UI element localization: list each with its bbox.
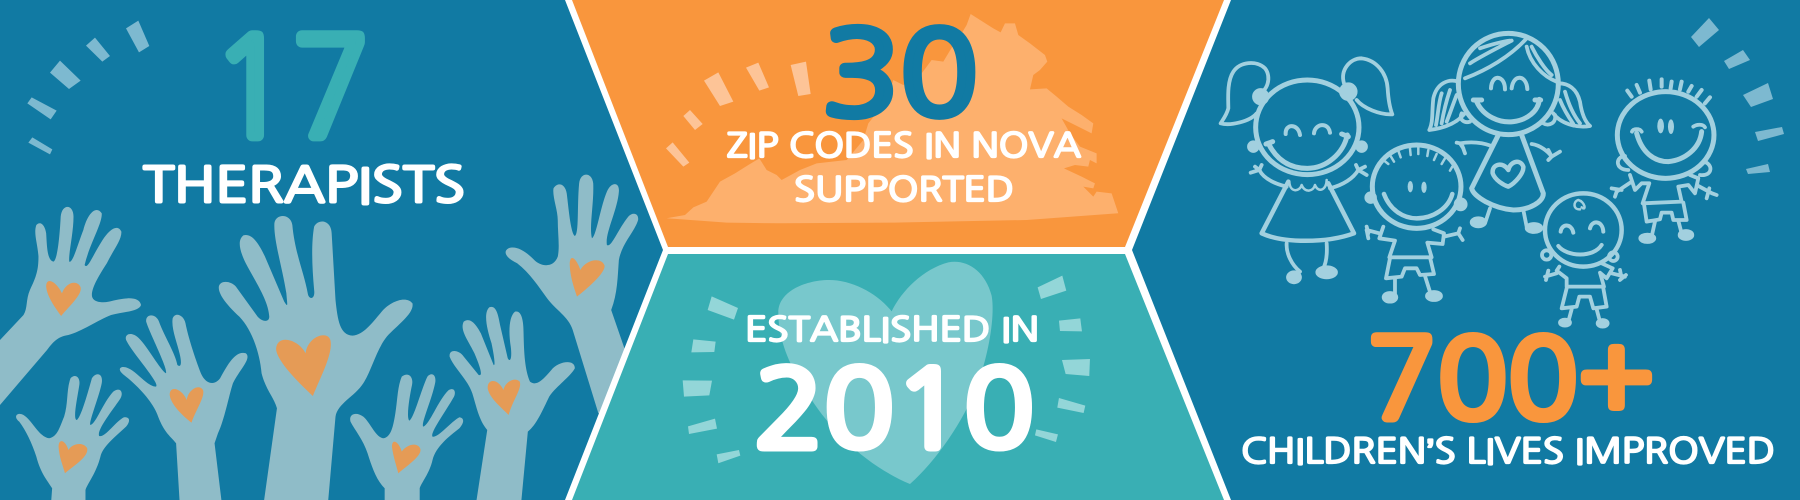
panel: established art [683, 262, 1090, 484]
stat number: 2010: 2010 [754, 357, 1034, 463]
stat number: 30: 30 [822, 16, 978, 132]
icon: large heart [778, 262, 993, 484]
icon: Virginia state map [667, 14, 1118, 223]
icon: raised hands [0, 175, 641, 500]
label: zip codes line 1: ZIP CODES IN NOVA [727, 129, 1081, 162]
panel: zip codes art [666, 14, 1118, 223]
icon: children left pair [1221, 58, 1466, 302]
boy right [1612, 79, 1717, 242]
boy left [1366, 145, 1466, 302]
label: zip codes line 2: SUPPORTED [794, 173, 1014, 206]
panel: established (teal) [572, 254, 1224, 500]
stat number: 700+: 700+ [1367, 324, 1654, 434]
label: established in: ESTABLISHED IN [745, 313, 1039, 346]
label: children's lives improved: CHILDREN ’S LIVES IMPROVED [1241, 433, 1775, 471]
ticks: established [683, 276, 1090, 463]
stat number: 17: 17 [211, 20, 371, 156]
panel: zip codes (orange) [572, 0, 1224, 247]
baby [1542, 193, 1626, 327]
panel: therapists illustration [0, 175, 641, 500]
icon: hearts on palms [46, 258, 605, 473]
ticks: therapists [27, 21, 149, 154]
girl centre [1429, 33, 1590, 232]
ticks: children [1691, 18, 1784, 174]
white divider hexagon [565, 0, 1231, 500]
icon: children right trio [1429, 33, 1717, 327]
ticks: zip codes [666, 62, 811, 167]
label: therapists: THERAPISTS [143, 161, 465, 210]
girl with pigtails [1221, 58, 1392, 282]
